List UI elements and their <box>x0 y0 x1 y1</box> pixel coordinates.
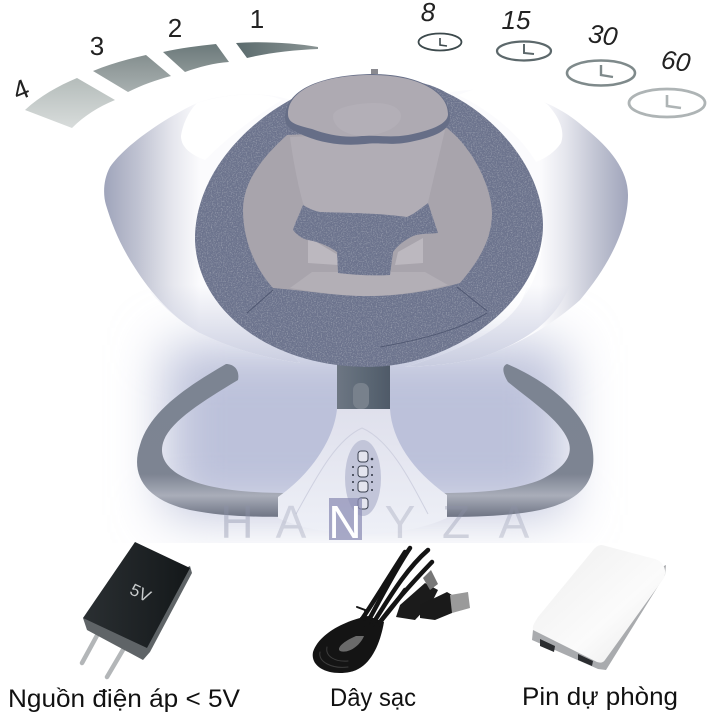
left shell lower shade <box>150 280 300 363</box>
timer 60 min <box>629 44 705 117</box>
lower liner band <box>290 272 448 296</box>
right shell white highlight <box>458 89 562 162</box>
speed level 1 <box>236 4 318 58</box>
icon: power adapter <box>82 542 192 677</box>
brand watermark <box>220 496 530 548</box>
speed level 2 <box>163 13 229 72</box>
icon: charging cable <box>313 548 470 673</box>
control panel <box>345 440 381 516</box>
left shell white highlight <box>181 95 282 160</box>
speed level 4: 4 <box>8 73 34 107</box>
barrel plug <box>396 570 438 620</box>
base frame tube <box>137 364 593 517</box>
seat seams <box>247 287 487 347</box>
label: adapter: Nguồn điện áp < 5V <box>8 685 240 713</box>
ghost swing shell: left <box>104 94 300 363</box>
adapter prongs <box>82 630 127 677</box>
headrest <box>285 74 450 145</box>
timer 30 min: 30 <box>587 18 620 52</box>
brand watermark: Z <box>442 496 470 548</box>
icon: power bank <box>532 545 666 670</box>
speed level 3: 3 <box>90 31 104 61</box>
speed level 3 <box>90 31 171 92</box>
seat inner liner <box>243 128 492 296</box>
brand watermark: A <box>276 496 307 548</box>
cable coil <box>313 616 384 673</box>
timer 15 min <box>497 5 551 60</box>
cable bundle <box>360 548 432 625</box>
speed level 2: 2 <box>168 13 182 43</box>
timer 60 min: 60 <box>659 44 693 78</box>
speed level 1: 1 <box>250 4 264 34</box>
timer 15 min: 15 <box>502 5 531 35</box>
ghost swing shell: right <box>405 89 628 367</box>
brand watermark: A <box>499 496 530 548</box>
seat outer fabric <box>195 78 543 367</box>
back panel <box>290 130 445 222</box>
harness <box>293 203 438 275</box>
usb plug <box>420 592 470 620</box>
seat <box>195 74 543 367</box>
lower window <box>308 237 423 265</box>
column button <box>353 383 369 409</box>
speed level 4 <box>8 73 115 128</box>
right shell lower shade <box>405 280 570 367</box>
timer 30 min <box>567 18 635 85</box>
top hook <box>371 69 378 74</box>
white base housing <box>278 409 447 534</box>
swing column with button <box>337 362 390 412</box>
timer 8 min <box>418 0 462 50</box>
brand watermark: N <box>328 496 362 548</box>
label: cable: Dây sạc <box>330 684 416 712</box>
label: power bank: Pin dự phòng <box>522 683 678 711</box>
brand watermark: H <box>220 496 254 548</box>
brand watermark: Y <box>385 496 415 548</box>
lavender backdrop glow <box>165 345 565 515</box>
icon: power adapter: 5V <box>127 580 155 606</box>
